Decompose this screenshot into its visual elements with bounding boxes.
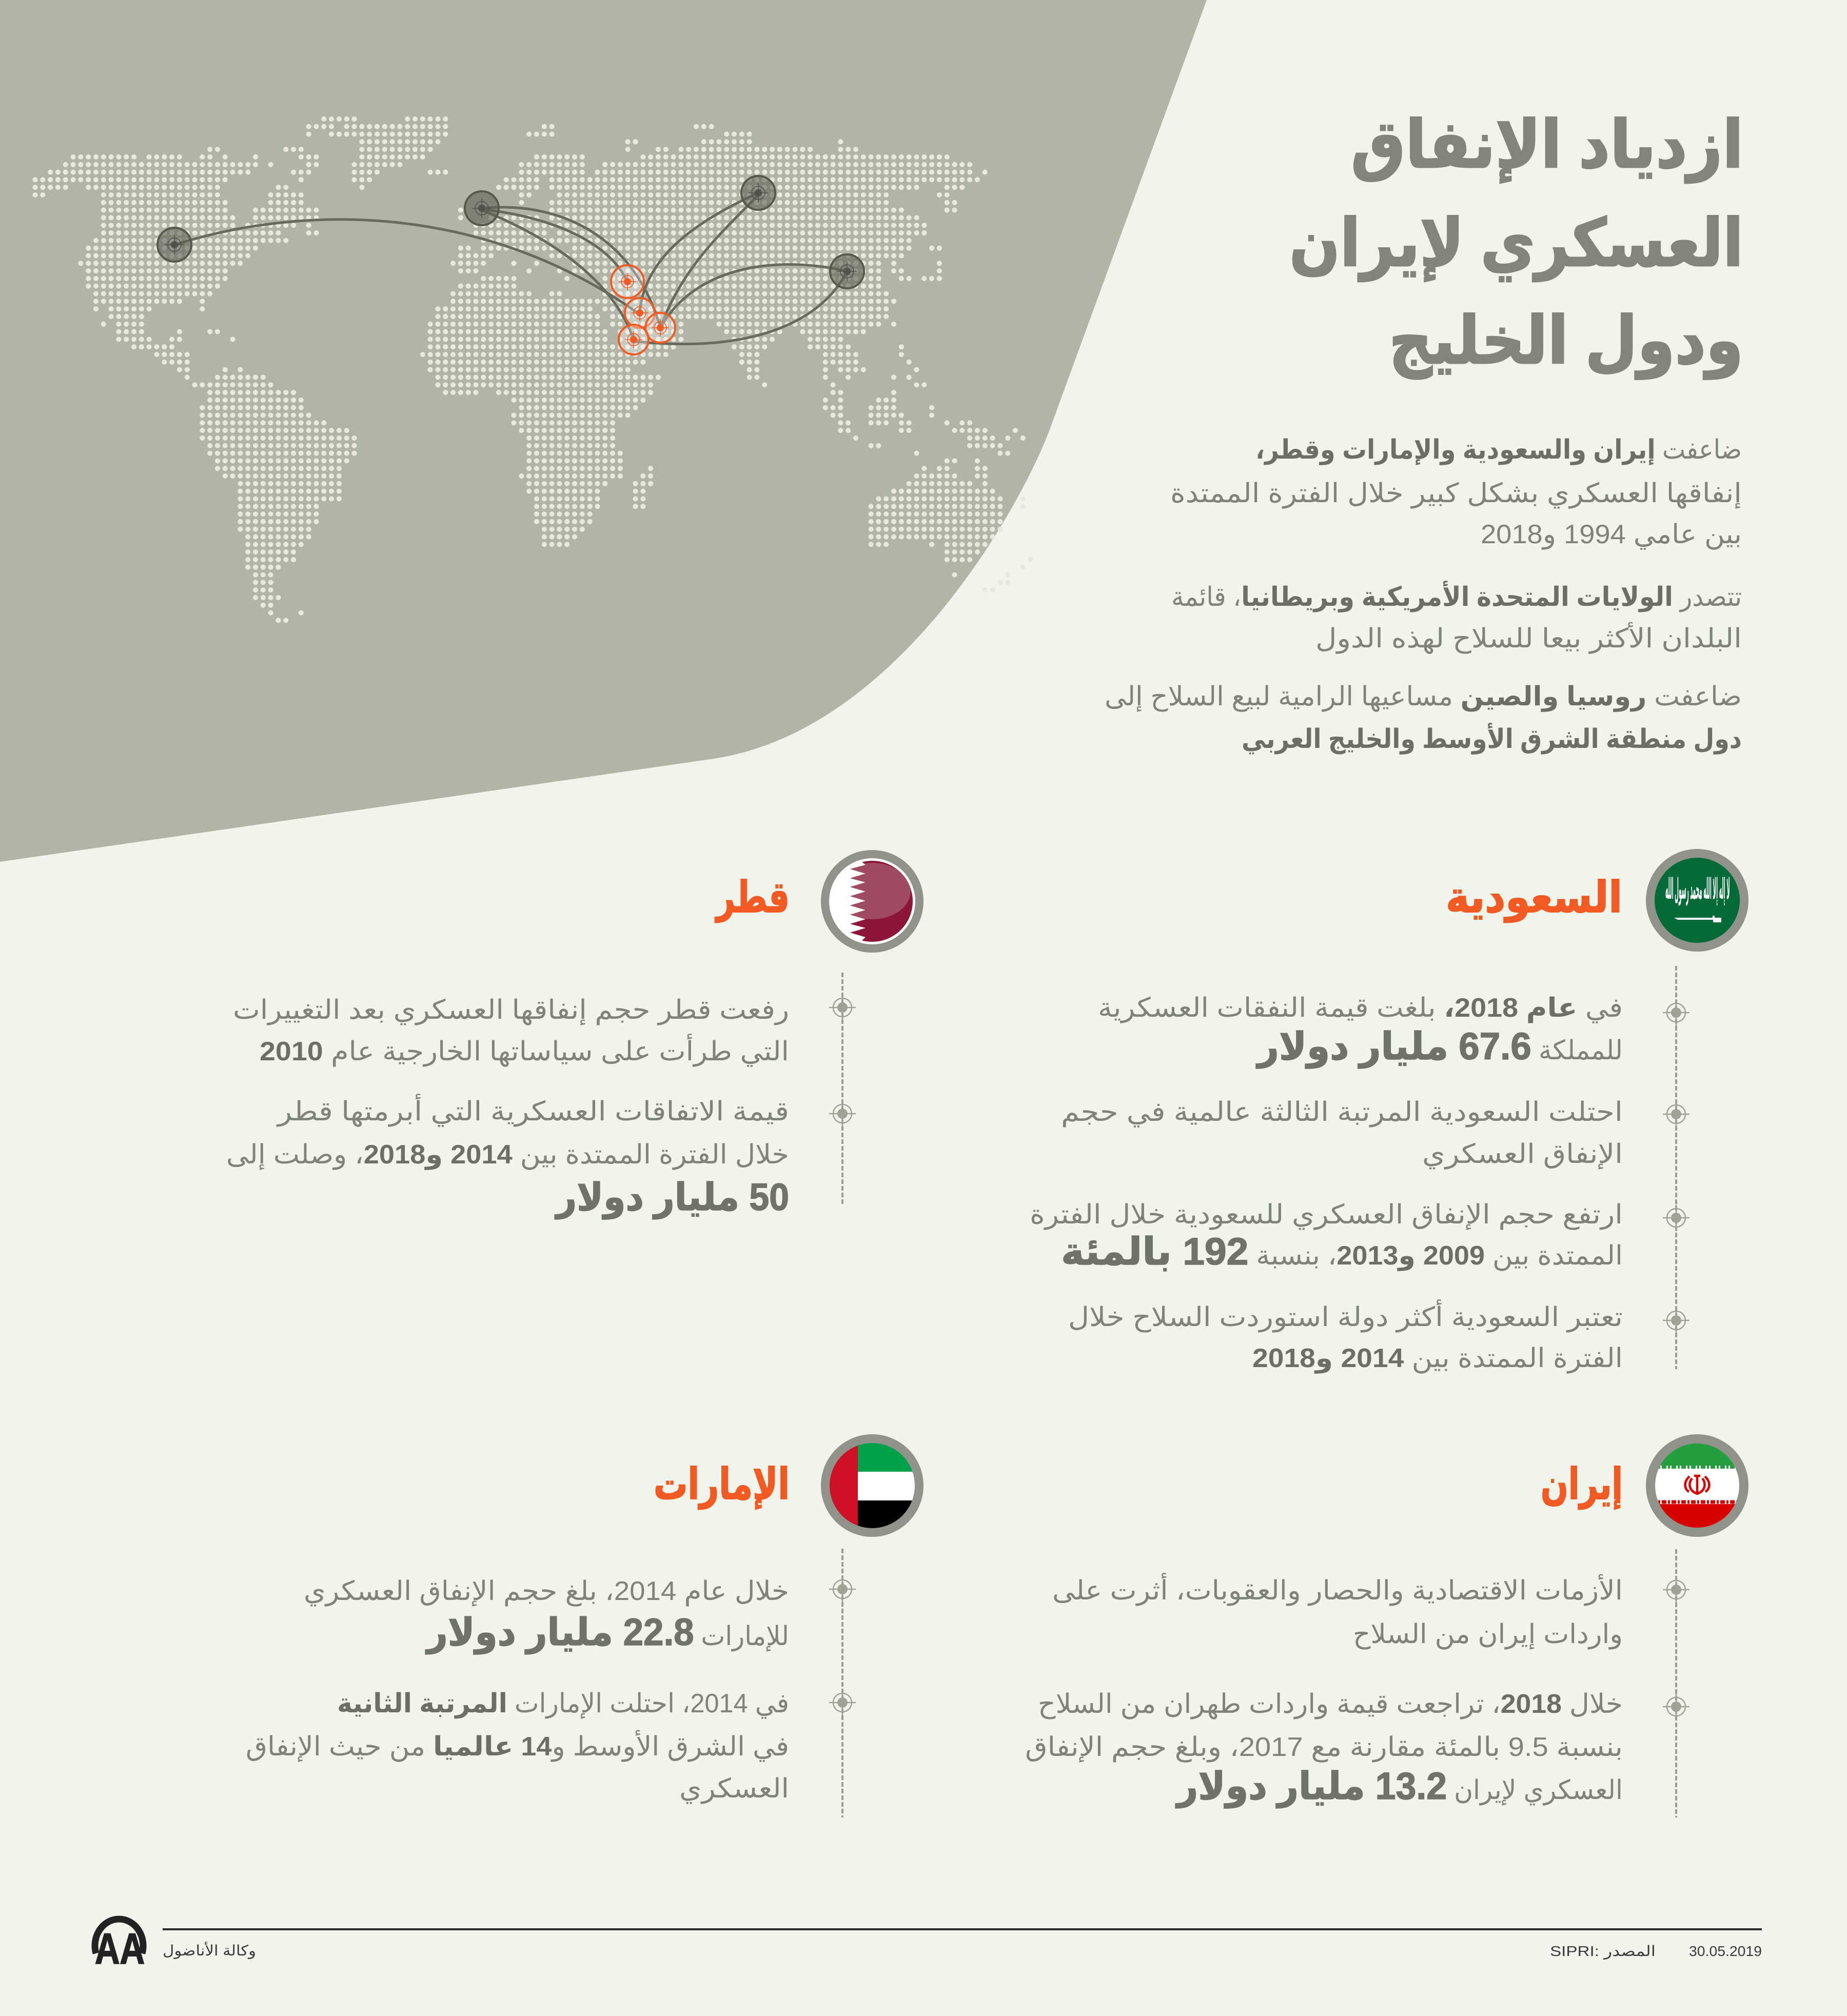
arrows: arms flows between exporters and gulf states [175, 193, 847, 344]
panel: Saudi Arabia [1030, 849, 1748, 1374]
marker: Saudi Arabia [625, 298, 655, 328]
text: Iran facts: خلال 2018، تراجعت قيمة واردات طهران من السلاح [1038, 1689, 1623, 1719]
text: UAE facts: في الشرق الأوسط و14 عالميا من حيث الإنفاق [246, 1730, 789, 1762]
arrow: UK to Qatar [482, 210, 634, 340]
marker: USA [158, 228, 191, 262]
icon: Qatar flag [821, 850, 924, 953]
panel: UAE [246, 1434, 924, 1817]
source: SIPRI: المصدر [1550, 1943, 1656, 1960]
text: Saudi facts: الفترة الممتدة بين 2014 و2018 [1252, 1343, 1623, 1374]
text: UAE facts: في 2014، احتلت الإمارات المرتبة الثانية [337, 1689, 789, 1719]
icon: UAE flag [821, 1434, 924, 1537]
text: Saudi facts: في عام 2018، بلغت قيمة النفقات العسكرية [1098, 993, 1623, 1023]
intro text: ضاعفت إيران والسعودية والإمارات وقطر، [1255, 435, 1742, 465]
text: Saudi facts: للمملكة 67.6 مليار دولار [1255, 1025, 1623, 1069]
text: Saudi facts: احتلت السعودية المرتبة الثالثة عالمية في حجم [1061, 1097, 1623, 1128]
intro text: بين عامي 1994 و2018 [1481, 520, 1742, 550]
text: Saudi facts: الممتدة بين 2009 و2013، بنسبة 192 بالمئة [1061, 1230, 1623, 1273]
heading: Qatar: قطر [715, 873, 790, 923]
text: Saudi facts [1030, 993, 1623, 1374]
heading: Saudi Arabia: السعودية [1446, 873, 1622, 923]
panel: map background shape [0, 0, 1207, 862]
text: Qatar facts: قيمة الاتفاقات العسكرية التي أبرمتها قطر [276, 1094, 789, 1127]
intro text [1105, 435, 1742, 755]
footer [95, 1919, 1762, 1973]
title [1289, 108, 1743, 380]
arrow: China to Qatar [634, 271, 847, 344]
text: Qatar facts: التي طرأت على سياساتها الخارجية عام 2010 [260, 1034, 789, 1067]
heading: Iran: إيران [1541, 1460, 1623, 1510]
timeline: Qatar [829, 973, 856, 1205]
arrow: China to UAE [660, 265, 847, 328]
text: UAE facts: العسكري [679, 1774, 789, 1804]
arrow: UK to UAE [482, 207, 660, 328]
text: Iran facts: الأزمات الاقتصادية والحصار والعقوبات، أثرت على [1052, 1573, 1623, 1606]
title: ازدياد الإنفاق [1351, 108, 1743, 184]
marker: Russia [741, 176, 775, 210]
text: Saudi facts: ارتفع حجم الإنفاق العسكري للسعودية خلال الفترة [1030, 1200, 1623, 1230]
text: Saudi facts: تعتبر السعودية أكثر دولة استوردت السلاح خلال [1068, 1299, 1623, 1333]
text: Qatar facts: 50 مليار دولار [554, 1176, 789, 1220]
date: 30.05.2019 [1689, 1943, 1762, 1959]
title: العسكري لإيران [1289, 207, 1743, 282]
text: Qatar facts: رفعت قطر حجم إنفاقها العسكري بعد التغييرات [233, 995, 789, 1025]
marker: UK [465, 191, 499, 225]
text: Iran facts: واردات إيران من السلاح [1353, 1619, 1623, 1650]
arrow: Russia to UAE [660, 195, 758, 328]
text: UAE facts: خلال عام 2014، بلغ حجم الإنفاق العسكري [304, 1576, 789, 1607]
marker: Qatar [619, 325, 649, 354]
intro text: تتصدر الولايات المتحدة الأمريكية وبريطانيا، قائمة [1171, 580, 1742, 612]
agency name: وكالة الأناضول [163, 1941, 256, 1959]
text: UAE facts: للإمارات 22.8 مليار دولار [425, 1611, 789, 1655]
icon: Saudi flag [1646, 849, 1748, 952]
intro text: دول منطقة الشرق الأوسط والخليج العربي [1242, 722, 1742, 755]
arrow: Russia to Saudi Arabia [640, 193, 758, 313]
text: UAE facts [246, 1576, 789, 1804]
marker: China [830, 254, 864, 288]
title: ودول الخليج [1389, 304, 1743, 380]
marker: UAE [645, 313, 675, 343]
text: Iran facts: العسكري لإيران 13.2 مليار دولار [1175, 1765, 1623, 1809]
text: Iran facts [1025, 1573, 1623, 1809]
icon: Anadolu Agency logo: AA [95, 1925, 145, 1973]
text: Saudi facts: الإنفاق العسكري [1422, 1139, 1623, 1170]
timeline: UAE [829, 1549, 856, 1817]
world dot map [35, 119, 1031, 620]
panel: Qatar [226, 850, 924, 1220]
arrow: UK to Iran [482, 209, 627, 282]
text: Iran facts: بنسبة 9.5 بالمئة مقارنة مع 2017، وبلغ حجم الإنفاق [1025, 1732, 1623, 1763]
exporter markers [158, 176, 864, 288]
intro text: ضاعفت روسيا والصين مساعيها الرامية لبيع السلاح إلى [1105, 682, 1742, 712]
text: Qatar facts [226, 995, 789, 1220]
text: Qatar facts: خلال الفترة الممتدة بين 2014 و2018، وصلت إلى [226, 1140, 789, 1170]
intro text: إنفاقها العسكري بشكل كبير خلال الفترة الممتدة [1170, 479, 1742, 509]
panel: Iran [1025, 1434, 1748, 1817]
arrow: USA to Saudi Arabia [175, 220, 640, 314]
heading: UAE: الإمارات [654, 1460, 790, 1510]
intro text: البلدان الأكثر بيعا للسلاح لهذه الدول [1315, 622, 1742, 654]
marker: Iran [611, 265, 644, 298]
icon: Iran flag [1646, 1434, 1748, 1537]
timeline: Iran [1663, 1549, 1689, 1817]
timeline: Saudi Arabia [1663, 966, 1689, 1369]
importer markers [611, 265, 675, 354]
